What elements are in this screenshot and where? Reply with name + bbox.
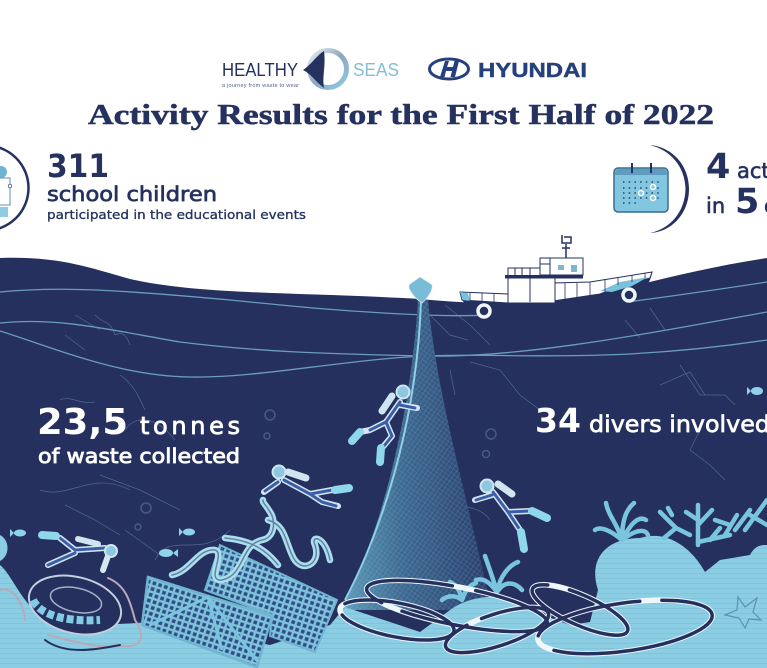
starfish — [725, 597, 761, 628]
stat: activities — [706, 147, 767, 222]
logo: Hyundai: HYUNDAI — [478, 60, 587, 82]
icon: calendar — [614, 145, 689, 233]
stat: activities: in — [706, 194, 725, 218]
headline: waste collected: tonnes — [140, 412, 240, 440]
headline: waste collected — [37, 402, 240, 468]
buoy — [409, 277, 432, 303]
stat: school children: participated in the educational events — [47, 207, 306, 222]
stat: activities: 4 — [706, 147, 730, 187]
fish — [10, 387, 763, 557]
logo: Healthy Seas: SEAS — [353, 60, 399, 80]
wave lines — [0, 282, 767, 377]
headline: waste collected: of waste collected — [38, 444, 240, 468]
seabed — [0, 536, 767, 668]
bubbles — [135, 410, 496, 530]
diver: near net — [352, 386, 417, 462]
headline: divers involved label: divers involved — [589, 412, 767, 438]
ghost diver outlines — [40, 305, 735, 560]
logo: Healthy Seas: a journey from waste to wear — [222, 83, 299, 89]
headline: waste collected: 23,5 — [37, 402, 128, 443]
diver: lower right — [475, 480, 547, 549]
abandoned ropes — [0, 500, 330, 650]
diver: middle left — [264, 466, 349, 506]
panel: sea — [0, 258, 767, 668]
stat: school children: 311 — [47, 147, 109, 185]
boat — [460, 235, 652, 322]
diver: lower left — [42, 535, 117, 570]
crab pot: back — [205, 545, 337, 652]
logo: Healthy Seas — [222, 50, 399, 89]
crab pot: front — [142, 577, 272, 667]
lost fishing rings — [337, 570, 715, 663]
headline: divers involved: 34 — [535, 401, 581, 440]
fishing net — [340, 300, 492, 610]
ghost tyre with weeds — [23, 566, 127, 644]
title: Activity Results for the First Half of 2022 — [88, 99, 714, 131]
corals — [442, 500, 767, 600]
logo: Hyundai — [430, 59, 587, 82]
stat: activities: 5 — [735, 182, 759, 222]
icon: school child — [0, 146, 28, 230]
stat: school children — [47, 147, 306, 222]
stat: school children: school children — [47, 182, 217, 206]
logo: Healthy Seas: HEALTHY — [222, 60, 298, 80]
